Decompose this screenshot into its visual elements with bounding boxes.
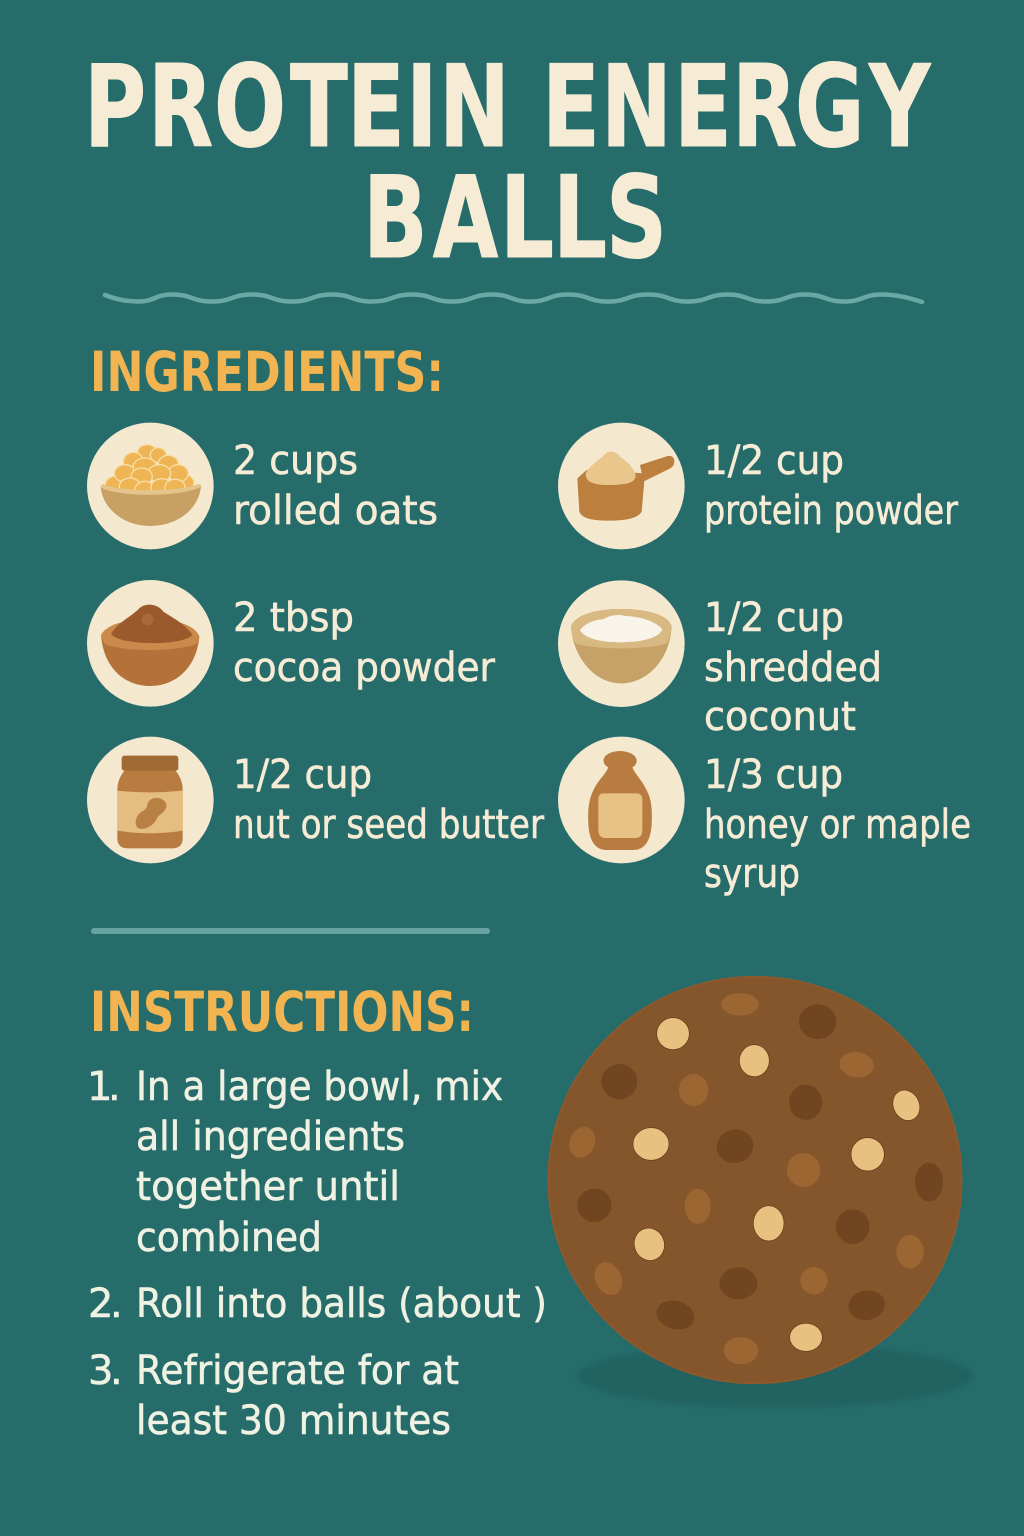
label: protein powder <box>704 438 958 534</box>
step 3: 3. <box>88 1348 123 1394</box>
label: nut butter: 1/2 cup <box>233 752 372 798</box>
label: cocoa powder: 2 tbsp <box>233 595 354 641</box>
label: rolled oats: 2 cups <box>233 438 358 484</box>
label: cocoa powder <box>233 595 496 691</box>
label: honey or maple syrup: 1/3 cup <box>704 752 843 798</box>
label: protein powder: protein powder <box>704 488 958 534</box>
label: rolled oats: rolled oats <box>233 488 438 534</box>
step 1: combined <box>136 1215 322 1261</box>
title: PROTEIN ENERGY <box>84 41 932 173</box>
label: honey or maple syrup: honey or maple <box>704 802 971 848</box>
heading: instructions: INSTRUCTIONS: <box>90 980 474 1044</box>
step 1: 1. <box>87 1064 121 1110</box>
label: shredded coconut <box>704 595 882 740</box>
step 2: Roll into balls (about ) <box>136 1281 547 1327</box>
icon: rolled oats <box>87 423 214 549</box>
step 3: Refrigerate for at <box>136 1348 459 1394</box>
label: shredded coconut: coconut <box>704 694 856 740</box>
label: shredded coconut: shredded <box>704 645 882 691</box>
title <box>84 41 932 284</box>
icon: shredded coconut <box>558 580 685 707</box>
step 3: least 30 minutes <box>136 1398 451 1444</box>
label: nut butter <box>233 752 544 848</box>
label: shredded coconut: 1/2 cup <box>704 595 844 641</box>
icon: honey bottle <box>558 737 685 863</box>
ball body <box>548 977 962 1383</box>
icon: cocoa powder <box>87 580 214 707</box>
label: rolled oats <box>233 438 438 534</box>
icon: protein powder scoop <box>558 423 685 549</box>
label: honey or maple syrup: syrup <box>704 851 800 897</box>
label: cocoa powder: cocoa powder <box>233 645 496 691</box>
title: BALLS <box>363 152 667 284</box>
step 1: In a large bowl, mix <box>136 1064 503 1110</box>
label: protein powder: 1/2 cup <box>704 438 844 484</box>
step 3 <box>88 1348 459 1444</box>
panel: ingredients list <box>87 423 971 897</box>
ball shadow <box>577 1344 973 1408</box>
label: nut butter: nut or seed butter <box>233 802 544 848</box>
step 1: together until <box>136 1164 400 1210</box>
illustration: energy ball <box>548 977 962 1383</box>
step 1: all ingredients <box>136 1114 405 1160</box>
step 1 <box>87 1064 503 1261</box>
label: honey or maple syrup <box>704 752 971 897</box>
heading: ingredients: INGREDIENTS: <box>90 340 444 404</box>
panel: instructions list <box>87 1064 547 1444</box>
step 2: 2. <box>88 1281 123 1327</box>
icon: nut butter jar <box>87 737 214 863</box>
